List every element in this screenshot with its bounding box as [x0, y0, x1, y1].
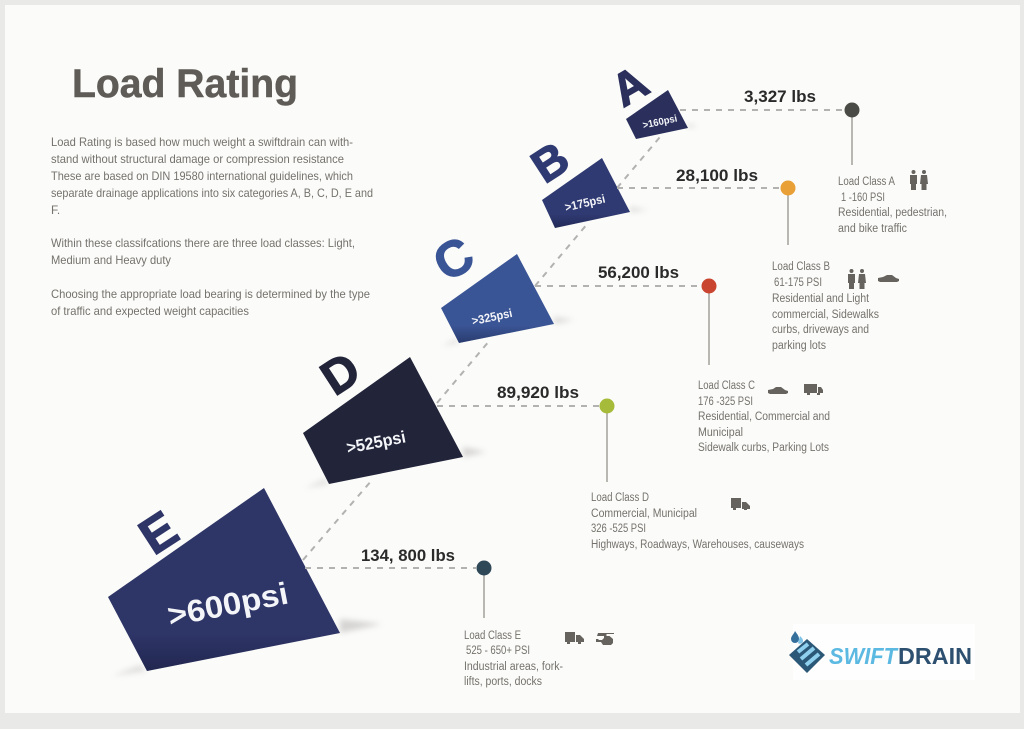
letter A: A: [602, 55, 657, 117]
intro text: Load Rating is based how much weight a swiftdrain can with-: [51, 135, 353, 149]
intro text: separate drainage applications into six categories A, B, C, D, E and: [51, 186, 373, 200]
load class D text: Load Class D: [591, 492, 649, 504]
load class C text: Municipal: [698, 427, 743, 439]
load class D text: Commercial, Municipal: [591, 508, 697, 520]
load class A text: Residential, pedestrian,: [838, 207, 947, 219]
letter E: E: [129, 500, 188, 565]
block E: [108, 488, 382, 676]
load class B text: [772, 261, 879, 352]
callout A: [680, 87, 860, 165]
value B: >175psi: [563, 192, 607, 214]
load class E text: Load Class E: [464, 630, 521, 642]
callout B: [617, 166, 796, 245]
diagonal dashed connector: [303, 137, 660, 560]
letter C: C: [424, 226, 483, 292]
value E: >600psi: [165, 576, 291, 633]
letter D: D: [312, 343, 370, 406]
letter B: B: [522, 131, 578, 193]
block C: [424, 226, 574, 346]
icon: car C: [768, 387, 788, 394]
load class B text: commercial, Sidewalks: [772, 309, 879, 321]
load class C text: [698, 380, 830, 454]
value D: >525psi: [345, 427, 407, 458]
logo icon: [789, 631, 825, 673]
block A: [602, 55, 698, 139]
intro text: of traffic and expected weight capacities: [51, 304, 249, 318]
load class D text: Highways, Roadways, Warehouses, causeways: [591, 539, 804, 551]
load class B text: curbs, driveways and: [772, 324, 869, 336]
icon: car B: [878, 275, 899, 282]
intro text: Choosing the appropriate load bearing is determined by the type: [51, 287, 370, 301]
load class D text: 326 -525 PSI: [591, 523, 646, 535]
load class B text: 61-175 PSI: [774, 277, 822, 289]
title: Load Rating: [72, 62, 298, 106]
load class E text: 525 - 650+ PSI: [466, 645, 530, 657]
block B: [522, 131, 648, 228]
load class A text: and bike traffic: [838, 223, 907, 235]
icon: truck D: [731, 498, 750, 510]
intro text: F.: [51, 203, 60, 217]
load class E text: [464, 630, 563, 688]
icon: truck C: [804, 384, 823, 395]
load class A text: 1 -160 PSI: [841, 192, 885, 204]
load class B text: parking lots: [772, 340, 826, 352]
block D: [303, 343, 486, 488]
logo: Swiftdrain: DRAIN: [898, 643, 972, 669]
icon: truck E: [565, 632, 584, 644]
intro text: stand without structural damage or compression resistance: [51, 152, 344, 166]
callout E: [305, 546, 492, 618]
load class C text: Residential, Commercial and: [698, 411, 830, 423]
load class E text: Industrial areas, fork-: [464, 661, 563, 673]
load class C text: 176 -325 PSI: [698, 396, 753, 408]
callout C: 56,200 lbs: [598, 263, 679, 282]
load class A text: Load Class A: [838, 176, 895, 188]
icon: people B: [848, 269, 866, 289]
logo: Swiftdrain: [789, 624, 975, 680]
load class B text: Residential and Light: [772, 293, 870, 305]
callout D: 89,920 lbs: [497, 383, 579, 402]
callout B: 28,100 lbs: [676, 166, 758, 185]
load class C text: Sidewalk curbs, Parking Lots: [698, 442, 829, 454]
icon: helicopter E: [596, 633, 614, 645]
load class D text: [591, 492, 804, 551]
callout A: 3,327 lbs: [744, 87, 816, 106]
intro text: Within these classifcations there are three load classes: Light,: [51, 236, 355, 250]
callout E: 134, 800 lbs: [361, 546, 455, 565]
intro text: These are based on DIN 19580 international guidelines, which: [51, 169, 353, 183]
intro text: [51, 135, 373, 318]
icon: people A: [910, 170, 928, 190]
callout D: [437, 383, 614, 482]
intro text: Medium and Heavy duty: [51, 253, 171, 267]
callout C: [535, 263, 716, 365]
value A: >160psi: [642, 113, 679, 132]
load class E text: lifts, ports, docks: [464, 676, 542, 688]
value C: >325psi: [470, 306, 514, 328]
load class A text: [838, 176, 947, 235]
load class B text: Load Class B: [772, 261, 830, 273]
load class C text: Load Class C: [698, 380, 755, 392]
logo wordmark: SWIFT: [829, 643, 899, 669]
